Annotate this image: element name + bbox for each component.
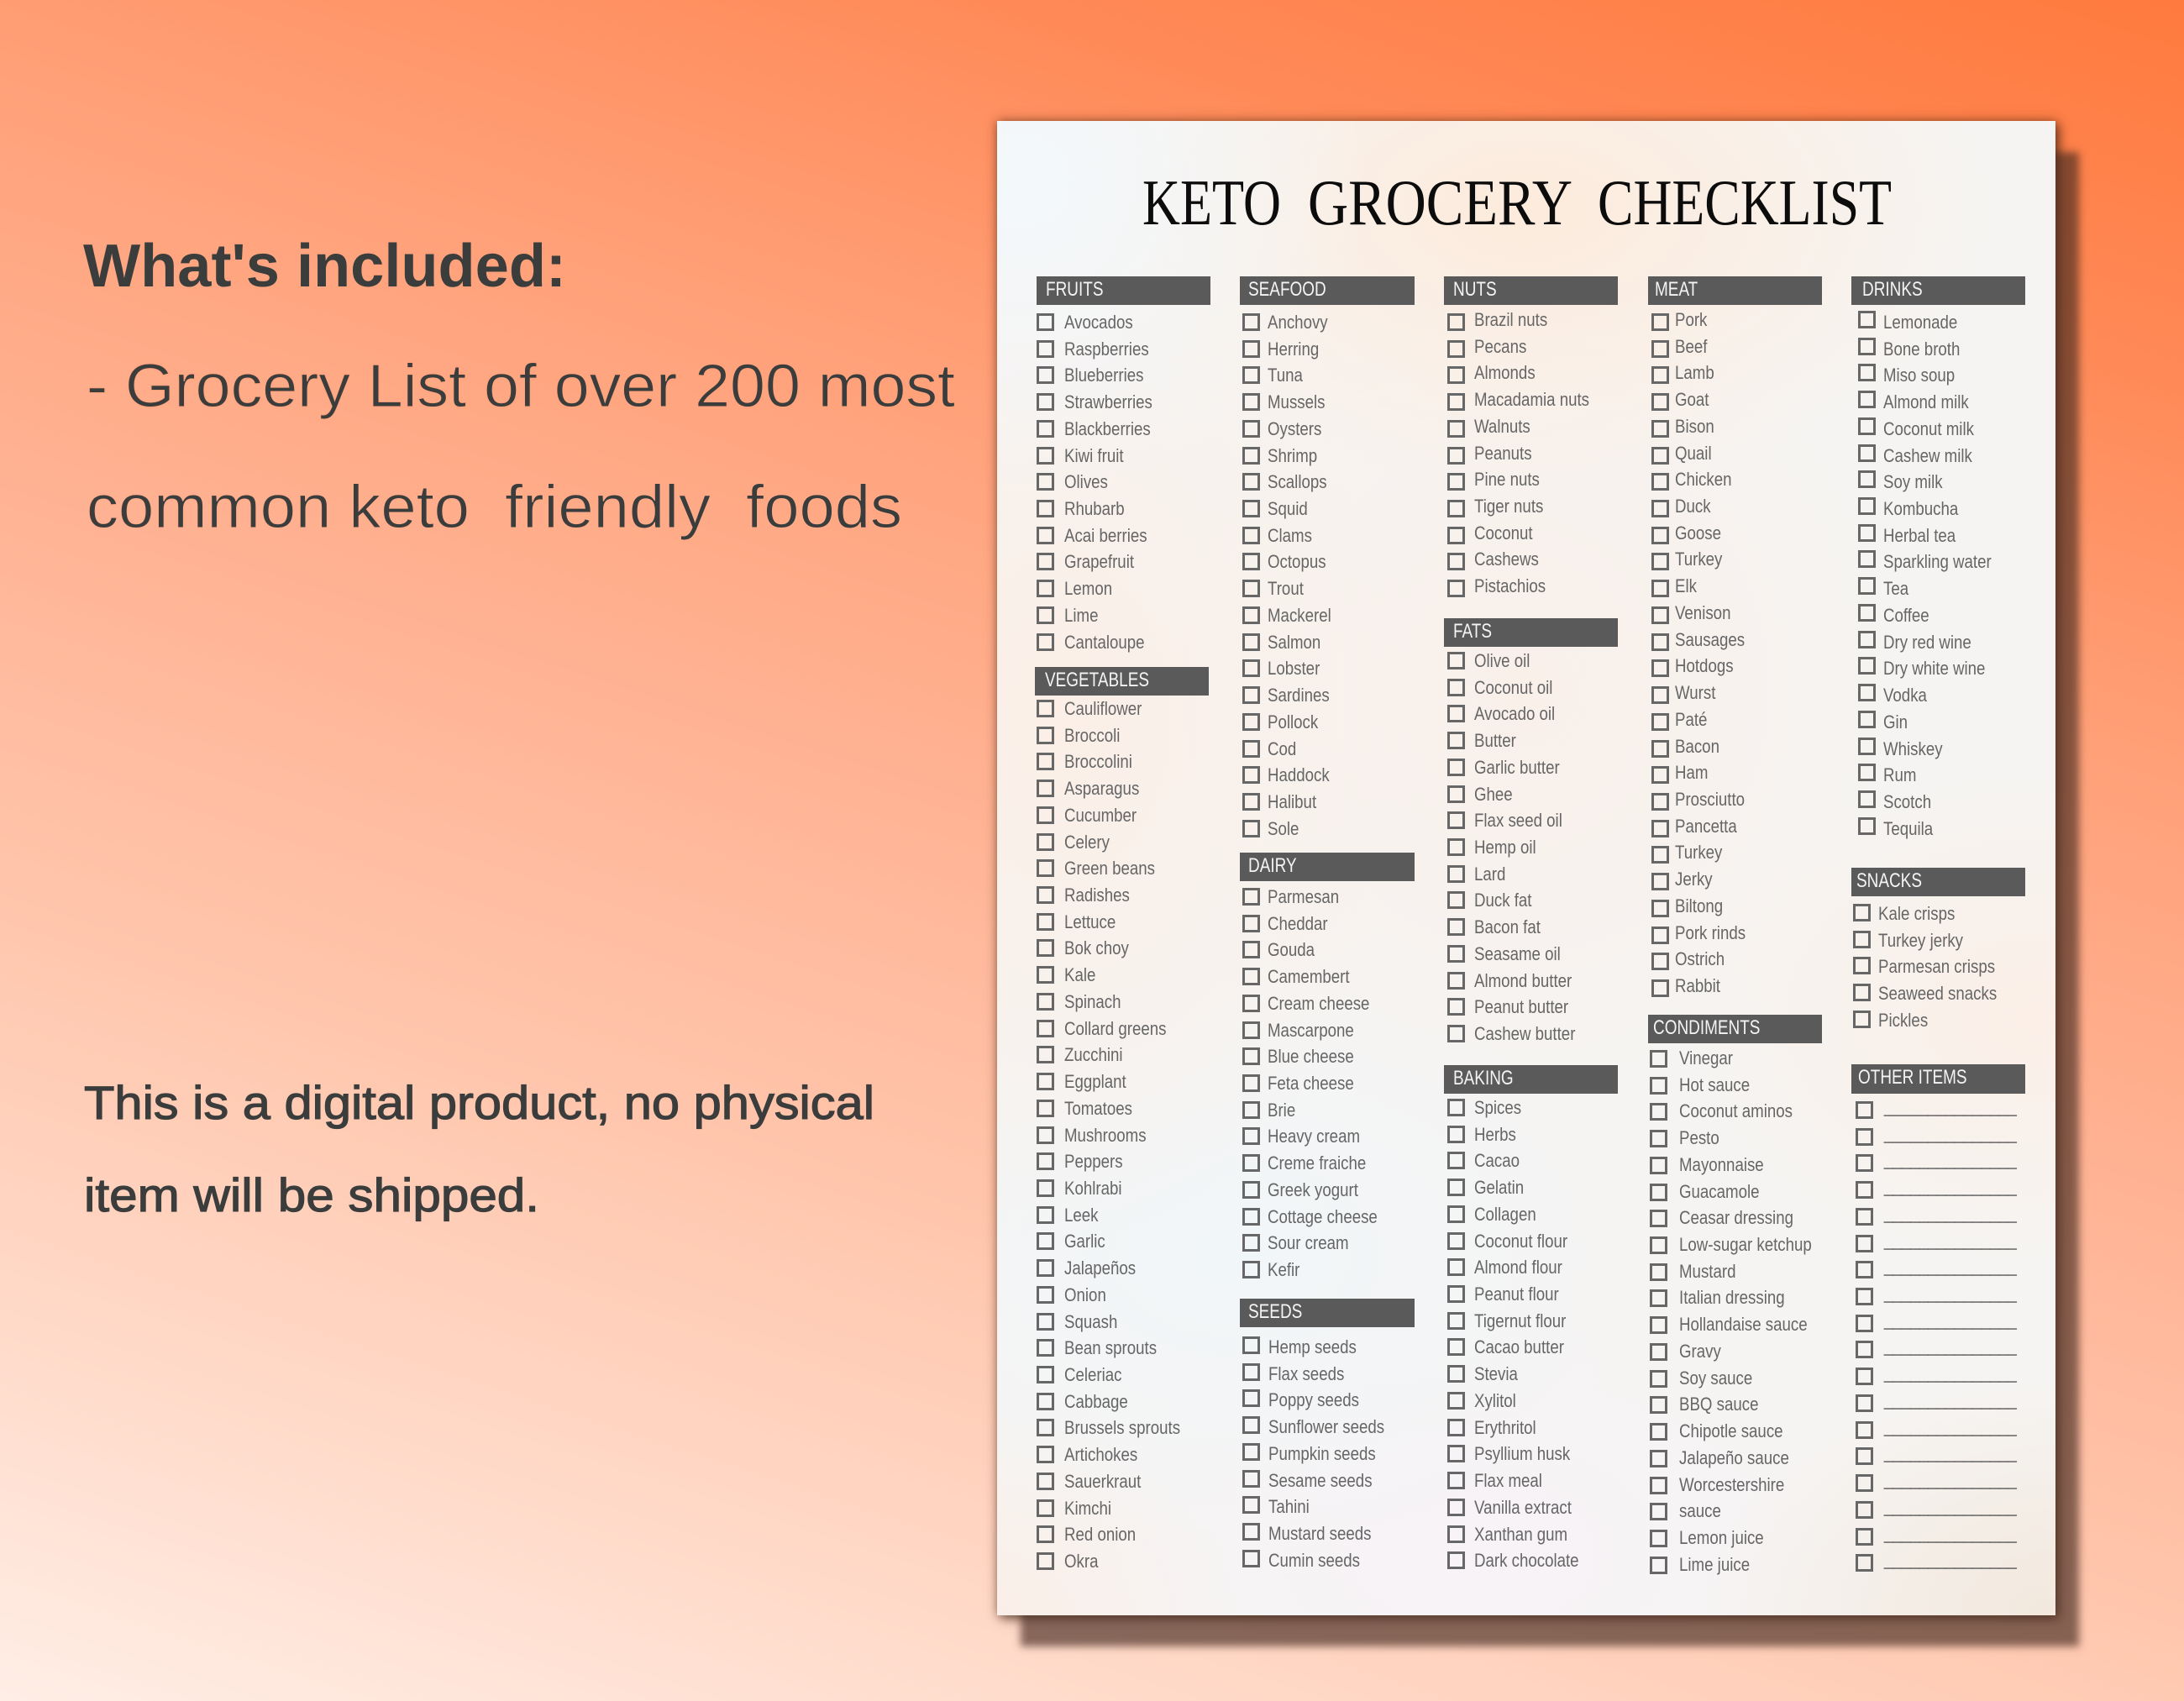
list: other items blank lines: _______________: [1884, 1550, 2017, 1571]
list: drinks: [1858, 311, 1992, 839]
list: vegetables: Artichokes: [1064, 1444, 1137, 1465]
list: snacks: Parmesan crisps: [1878, 956, 1995, 977]
list: fats: Coconut oil: [1474, 677, 1552, 698]
list: seeds: Hemp seeds: [1268, 1336, 1357, 1357]
heading: condiments: [1648, 1015, 1822, 1043]
list: seeds: Pumpkin seeds: [1268, 1443, 1376, 1464]
list: baking: Peanut flour: [1474, 1284, 1559, 1305]
heading: What's included: What's included:: [83, 233, 566, 300]
list: drinks: Soy milk: [1883, 471, 1943, 492]
list: vegetables: Lettuce: [1064, 911, 1116, 932]
list: meat: Venison: [1675, 602, 1730, 623]
heading: drinks: DRINKS: [1862, 278, 1923, 301]
list: meat: Lamb: [1675, 362, 1714, 383]
list: drinks: Rum: [1883, 764, 1916, 785]
list: fruits: Acai berries: [1064, 525, 1147, 546]
heading: meat: MEAT: [1655, 278, 1698, 301]
list: vegetables: Mushrooms: [1064, 1124, 1147, 1146]
list: fruits: Cantaloupe: [1064, 632, 1145, 653]
list: fruits: Blackberries: [1064, 418, 1151, 439]
list: seeds: Tahini: [1268, 1496, 1310, 1517]
list: fats: Garlic butter: [1474, 757, 1560, 778]
list: nuts: Pecans: [1474, 336, 1526, 357]
list: nuts: Cashews: [1474, 549, 1539, 570]
list: meat: Bacon: [1675, 736, 1719, 756]
list: seafood: Clams: [1268, 525, 1312, 546]
heading: fats: [1444, 618, 1618, 647]
list: fats: Duck fat: [1474, 890, 1532, 911]
list: meat: Turkey: [1675, 549, 1722, 570]
list: other items blank lines: _______________: [1884, 1497, 2017, 1518]
list: meat: Goat: [1675, 389, 1709, 410]
list: snacks: Turkey jerky: [1878, 930, 1963, 951]
list: drinks: Gin: [1883, 711, 1908, 732]
list: meat: Hotdogs: [1675, 655, 1734, 676]
list: seafood: Haddock: [1268, 764, 1330, 785]
list: baking: Tigernut flour: [1474, 1310, 1566, 1331]
list: seafood: Scallops: [1268, 471, 1327, 492]
list: drinks: Tequila: [1883, 818, 1933, 839]
list: meat: Wurst: [1675, 682, 1715, 703]
list: seafood: Pollock: [1268, 711, 1318, 732]
list: meat: Ostrich: [1675, 948, 1725, 969]
panel: checklist paper: [997, 121, 2055, 1615]
list: seeds: Cumin seeds: [1268, 1550, 1360, 1571]
list: other items blank lines: _______________: [1884, 1417, 2017, 1438]
list: snacks: Pickles: [1878, 1010, 1928, 1031]
list: meat: Pancetta: [1675, 816, 1737, 837]
list: other items blank lines: _______________: [1884, 1097, 2017, 1118]
list: vegetables: Radishes: [1064, 885, 1130, 906]
list: other items blank lines: _______________: [1884, 1231, 2017, 1252]
list: drinks: Dry red wine: [1883, 632, 1971, 653]
list: nuts: Peanuts: [1474, 443, 1532, 464]
list: fruits: Rhubarb: [1064, 498, 1125, 519]
heading: nuts: [1444, 276, 1618, 305]
text: digital product notice line 2: item will be shipped.: [84, 1168, 539, 1221]
heading: seafood: [1240, 276, 1415, 305]
title: KETO: [1142, 166, 1281, 239]
heading: snacks: SNACKS: [1856, 869, 1922, 892]
list: dairy: Creme fraiche: [1268, 1152, 1366, 1173]
list: baking: Spices: [1474, 1097, 1521, 1118]
list: meat: Jerky: [1675, 869, 1713, 890]
list: vegetables: Onion: [1064, 1284, 1106, 1305]
list: condiments: [1650, 1047, 1812, 1575]
heading: snacks: [1851, 868, 2025, 896]
list: vegetables: Eggplant: [1064, 1071, 1126, 1092]
list: other items blank lines: _______________: [1884, 1204, 2017, 1225]
list: seafood: [1242, 312, 1331, 839]
list: other items blank lines: _______________: [1884, 1150, 2017, 1171]
list: baking: Almond flour: [1474, 1257, 1562, 1278]
list: seeds: [1242, 1336, 1384, 1571]
list: dairy: Brie: [1268, 1100, 1295, 1121]
list: fats: Ghee: [1474, 784, 1513, 805]
list: vegetables: Bean sprouts: [1064, 1337, 1157, 1358]
list: vegetables: Okra: [1064, 1551, 1098, 1572]
list: seeds: Mustard seeds: [1268, 1523, 1371, 1544]
list: dairy: [1242, 886, 1378, 1280]
list: other items blank lines: _______________: [1884, 1177, 2017, 1198]
text: digital product notice line 1: This is a digital product, no physical: [84, 1076, 874, 1129]
list: nuts: Brazil nuts: [1474, 309, 1547, 330]
list: vegetables: Spinach: [1064, 991, 1121, 1012]
list: condiments: Jalapeño sauce: [1679, 1447, 1789, 1468]
list: vegetables: Green beans: [1064, 858, 1155, 879]
list: meat: [1651, 309, 1746, 997]
list: fats: Peanut butter: [1474, 996, 1568, 1017]
list: condiments: Gravy: [1679, 1341, 1721, 1362]
list: fruits: Strawberries: [1064, 391, 1152, 412]
list: dairy: Cottage cheese: [1268, 1206, 1378, 1227]
list: meat: Pork rinds: [1675, 922, 1746, 943]
heading: dairy: DAIRY: [1248, 854, 1297, 877]
list: baking: Cacao: [1474, 1150, 1520, 1171]
list: baking: Collagen: [1474, 1204, 1536, 1225]
list: dairy: Gouda: [1268, 939, 1315, 960]
heading: seafood: SEAFOOD: [1248, 278, 1326, 301]
list: meat: Elk: [1675, 575, 1697, 596]
list: condiments: Coconut aminos: [1679, 1100, 1793, 1121]
heading: fruits: [1037, 276, 1210, 305]
list: dairy: Cream cheese: [1268, 993, 1369, 1014]
list: other items blank lines: _______________: [1884, 1363, 2017, 1384]
list: drinks: Coffee: [1883, 605, 1929, 626]
list: drinks: Vodka: [1883, 685, 1927, 706]
list: seafood: Sole: [1268, 818, 1299, 839]
list: vegetables: Kohlrabi: [1064, 1178, 1122, 1199]
list: dairy: Heavy cream: [1268, 1126, 1360, 1147]
list: seafood: Sardines: [1268, 685, 1330, 706]
list: vegetables: Brussels sprouts: [1064, 1417, 1180, 1438]
list: drinks: Dry white wine: [1883, 658, 1985, 679]
list: nuts: Pine nuts: [1474, 469, 1540, 490]
list: drinks: Kombucha: [1883, 498, 1958, 519]
text: product description line 1: - Grocery List of over 200 most: [87, 353, 955, 420]
list: other items blank lines: _______________: [1884, 1470, 2017, 1491]
list: fats: Butter: [1474, 730, 1516, 751]
list: condiments: Pesto: [1679, 1127, 1719, 1148]
text: product description line 2: common keto friendly foods: [87, 474, 902, 541]
list: drinks: Whiskey: [1883, 738, 1943, 759]
list: baking: Xanthan gum: [1474, 1524, 1567, 1544]
list: dairy: Mascarpone: [1268, 1020, 1354, 1041]
list: drinks: Miso soup: [1883, 365, 1955, 386]
list: vegetables: Red onion: [1064, 1524, 1136, 1545]
list: drinks: Almond milk: [1883, 391, 1969, 412]
list: seafood: Tuna: [1268, 365, 1303, 386]
list: baking: Xylitol: [1474, 1390, 1516, 1411]
heading: nuts: NUTS: [1453, 278, 1497, 301]
list: condiments: Soy sauce: [1679, 1368, 1752, 1389]
list: fats: Seasame oil: [1474, 943, 1561, 964]
list: fruits: Grapefruit: [1064, 551, 1134, 572]
list: snacks: Kale crisps: [1878, 903, 1955, 924]
list: fats: Flax seed oil: [1474, 810, 1562, 831]
heading: drinks: [1851, 276, 2025, 305]
list: vegetables: Cabbage: [1064, 1391, 1128, 1412]
heading: seeds: [1240, 1299, 1415, 1327]
list: fats: Lard: [1474, 864, 1505, 885]
title: CHECKLIST: [1598, 166, 1892, 239]
list: condiments: Ceasar dressing: [1679, 1207, 1793, 1228]
list: seafood: Oysters: [1268, 418, 1321, 439]
list: vegetables: Sauerkraut: [1064, 1471, 1141, 1492]
list: meat: Bison: [1675, 416, 1714, 437]
list: drinks: Sparkling water: [1883, 551, 1992, 572]
list: seafood: Halibut: [1268, 791, 1316, 812]
list: baking: Herbs: [1474, 1124, 1516, 1145]
list: dairy: Blue cheese: [1268, 1046, 1354, 1067]
list: other items blank lines: _______________: [1884, 1257, 2017, 1278]
list: seafood: Trout: [1268, 578, 1304, 599]
list: meat: Turkey: [1675, 842, 1722, 863]
list: snacks: [1853, 903, 1997, 1031]
list: baking: Vanilla extract: [1474, 1497, 1572, 1518]
list: meat: Pork: [1675, 309, 1707, 330]
list: fruits: [1037, 312, 1152, 653]
list: vegetables: Kale: [1064, 964, 1095, 985]
list: condiments: Lime juice: [1679, 1554, 1750, 1575]
list: nuts: Walnuts: [1474, 416, 1530, 437]
list: dairy: Parmesan: [1268, 886, 1339, 907]
heading: dairy: [1240, 853, 1415, 881]
list: baking: Gelatin: [1474, 1177, 1524, 1198]
list: other items blank lines: _______________: [1884, 1390, 2017, 1411]
list: vegetables: Broccoli: [1064, 725, 1120, 746]
list: vegetables: Bok choy: [1064, 937, 1129, 958]
list: fats: Almond butter: [1474, 970, 1572, 991]
list: meat: Biltong: [1675, 895, 1723, 916]
list: seeds: Poppy seeds: [1268, 1389, 1359, 1410]
list: seafood: Anchovy: [1268, 312, 1328, 333]
list: baking: Flax meal: [1474, 1470, 1542, 1491]
list: meat: Beef: [1675, 336, 1707, 357]
list: condiments: Vinegar: [1679, 1047, 1733, 1068]
list: meat: Ham: [1675, 762, 1708, 783]
list: dairy: Greek yogurt: [1268, 1179, 1358, 1200]
list: fats: Avocado oil: [1474, 703, 1555, 724]
list: nuts: [1447, 309, 1589, 597]
list: baking: Psyllium husk: [1474, 1443, 1570, 1464]
list: seafood: Salmon: [1268, 632, 1320, 653]
list: other items blank lines: _______________: [1884, 1443, 2017, 1464]
list: fruits: Blueberries: [1064, 365, 1143, 386]
list: seafood: Mackerel: [1268, 605, 1331, 626]
list: seeds: Sunflower seeds: [1268, 1416, 1384, 1437]
list: other items blank lines: _______________: [1884, 1124, 2017, 1145]
list: drinks: Cashew milk: [1883, 445, 1972, 466]
list: baking: Dark chocolate: [1474, 1550, 1579, 1571]
list: seafood: Cod: [1268, 738, 1296, 759]
list: dairy: Camembert: [1268, 966, 1350, 987]
list: meat: Rabbit: [1675, 975, 1720, 996]
list: meat: Prosciutto: [1675, 789, 1745, 810]
list: fats: Cashew butter: [1474, 1023, 1575, 1044]
heading: other items: OTHER ITEMS: [1858, 1066, 1967, 1089]
list: baking: Erythritol: [1474, 1417, 1536, 1438]
list: seafood: Shrimp: [1268, 445, 1317, 466]
list: condiments: Hollandaise sauce: [1679, 1314, 1808, 1335]
list: condiments: BBQ sauce: [1679, 1394, 1758, 1415]
list: vegetables: Collard greens: [1064, 1018, 1166, 1039]
title: GROCERY: [1308, 166, 1572, 239]
list: dairy: Sour cream: [1268, 1232, 1349, 1253]
list: fruits: Raspberries: [1064, 339, 1149, 360]
list: snacks: Seaweed snacks: [1878, 983, 1997, 1004]
list: baking: Stevia: [1474, 1363, 1518, 1384]
heading: fats: FATS: [1453, 620, 1492, 643]
list: other items blank lines: [1856, 1097, 2018, 1572]
list: fruits: Avocados: [1064, 312, 1133, 333]
heading: seeds: SEEDS: [1248, 1300, 1302, 1323]
list: drinks: Bone broth: [1883, 339, 1960, 360]
list: vegetables: Broccolini: [1064, 751, 1132, 772]
list: vegetables: Leek: [1064, 1205, 1099, 1226]
heading: meat: [1648, 276, 1822, 305]
list: condiments: Italian dressing: [1679, 1287, 1785, 1308]
list: meat: Duck: [1675, 496, 1711, 517]
list: vegetables: Tomatoes: [1064, 1098, 1132, 1119]
list: fruits: Olives: [1064, 471, 1108, 492]
list: seafood: Octopus: [1268, 551, 1326, 572]
heading: vegetables: [1035, 667, 1209, 696]
list: vegetables: Squash: [1064, 1311, 1117, 1332]
list: condiments: sauce: [1679, 1500, 1721, 1521]
heading: baking: [1444, 1065, 1618, 1094]
list: nuts: Pistachios: [1474, 575, 1546, 596]
list: condiments: Lemon juice: [1679, 1527, 1764, 1548]
list: vegetables: Cauliflower: [1064, 698, 1142, 719]
list: baking: Cacao butter: [1474, 1336, 1564, 1357]
list: fats: [1447, 650, 1576, 1044]
list: nuts: Almonds: [1474, 362, 1536, 383]
list: other items blank lines: _______________: [1884, 1284, 2017, 1305]
list: drinks: Lemonade: [1883, 312, 1957, 333]
heading: condiments: CONDIMENTS: [1653, 1016, 1760, 1039]
list: fats: Olive oil: [1474, 650, 1530, 671]
list: condiments: Hot sauce: [1679, 1074, 1750, 1095]
list: fats: Hemp oil: [1474, 837, 1536, 858]
list: dairy: Kefir: [1268, 1259, 1299, 1280]
list: vegetables: Peppers: [1064, 1151, 1123, 1172]
heading: fruits: FRUITS: [1046, 278, 1103, 301]
list: nuts: Tiger nuts: [1474, 496, 1543, 517]
list: other items blank lines: _______________: [1884, 1310, 2017, 1331]
list: drinks: Scotch: [1883, 791, 1931, 812]
list: vegetables: Asparagus: [1064, 778, 1139, 799]
list: vegetables: Celeriac: [1064, 1364, 1122, 1385]
list: dairy: Feta cheese: [1268, 1073, 1354, 1094]
list: vegetables: Celery: [1064, 832, 1110, 853]
list: condiments: Worcestershire: [1679, 1473, 1784, 1495]
list: seeds: Sesame seeds: [1268, 1470, 1373, 1491]
heading: baking: BAKING: [1453, 1067, 1514, 1089]
list: meat: Paté: [1675, 709, 1707, 730]
list: fats: Bacon fat: [1474, 916, 1541, 937]
list: vegetables: Zucchini: [1064, 1044, 1123, 1065]
list: nuts: Coconut: [1474, 522, 1533, 543]
list: nuts: Macadamia nuts: [1474, 389, 1589, 410]
list: fruits: Kiwi fruit: [1064, 445, 1124, 466]
list: meat: Chicken: [1675, 469, 1731, 490]
list: meat: Quail: [1675, 443, 1712, 464]
list: vegetables: Jalapeños: [1064, 1257, 1136, 1278]
list: meat: Sausages: [1675, 629, 1745, 650]
list: baking: [1447, 1097, 1579, 1571]
list: fruits: Lime: [1064, 605, 1098, 626]
list: drinks: Herbal tea: [1883, 525, 1956, 546]
list: meat: Goose: [1675, 522, 1721, 543]
list: seafood: Mussels: [1268, 391, 1326, 412]
list: condiments: Low-sugar ketchup: [1679, 1234, 1812, 1255]
list: condiments: Mayonnaise: [1679, 1154, 1764, 1175]
list: vegetables: Garlic: [1064, 1231, 1105, 1252]
list: baking: Coconut flour: [1474, 1231, 1567, 1252]
list: condiments: Chipotle sauce: [1679, 1420, 1783, 1441]
list: vegetables: [1037, 698, 1180, 1572]
list: condiments: Mustard: [1679, 1261, 1735, 1282]
list: drinks: Tea: [1883, 578, 1908, 599]
list: seafood: Squid: [1268, 498, 1308, 519]
list: condiments: Guacamole: [1679, 1181, 1760, 1202]
list: seeds: Flax seeds: [1268, 1363, 1344, 1384]
list: vegetables: Kimchi: [1064, 1498, 1111, 1519]
list: other items blank lines: _______________: [1884, 1524, 2017, 1544]
list: seafood: Lobster: [1268, 658, 1320, 679]
heading: vegetables: VEGETABLES: [1045, 669, 1149, 691]
list: fruits: Lemon: [1064, 578, 1112, 599]
list: dairy: Cheddar: [1268, 913, 1328, 934]
list: seafood: Herring: [1268, 339, 1319, 360]
list: drinks: Coconut milk: [1883, 418, 1974, 439]
heading: other items: [1851, 1064, 2025, 1094]
list: other items blank lines: _______________: [1884, 1336, 2017, 1357]
list: vegetables: Cucumber: [1064, 805, 1137, 826]
